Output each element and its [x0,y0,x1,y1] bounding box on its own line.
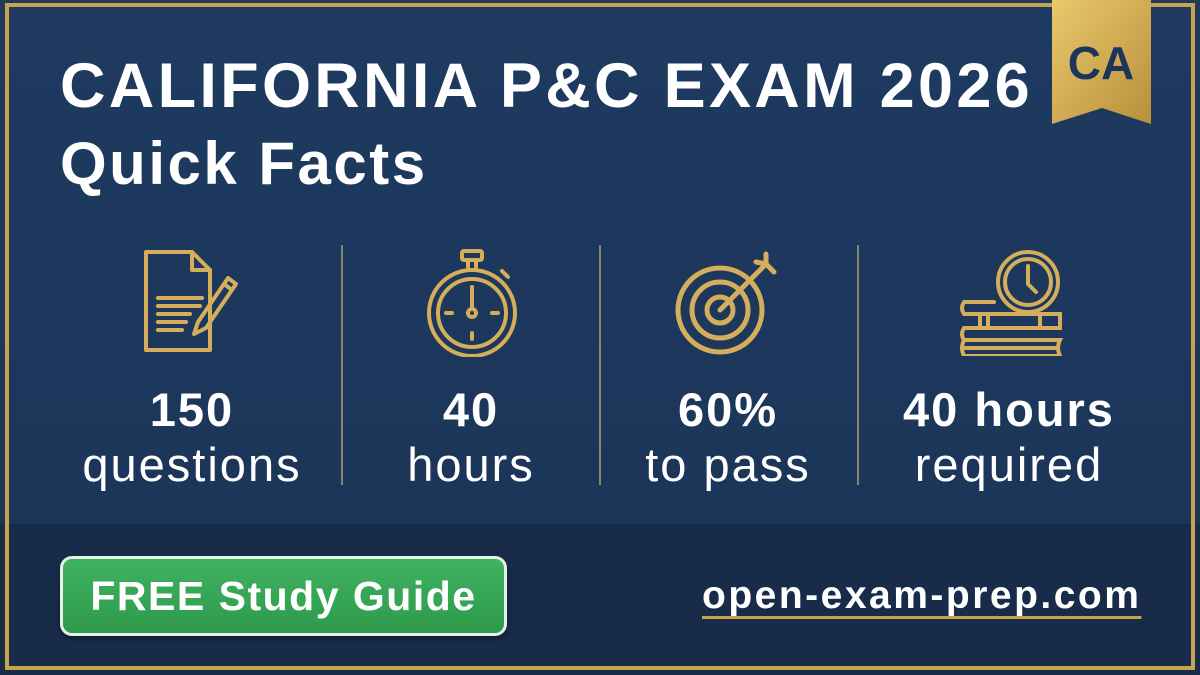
stat: 40 hours required [903,383,1115,491]
url text: open-exam-prep.com [702,574,1141,617]
icon: document with pen [144,250,238,352]
button: FREE Study Guide [60,556,507,636]
icon: stopwatch [427,249,517,357]
stat: 150 questions: questions [82,438,302,491]
bottom band [0,524,1200,675]
icon: books and clock [960,250,1064,356]
stat: 60% to pass: to pass [645,438,811,491]
main panel [0,0,1200,524]
subtitle: Quick Facts [60,130,428,197]
stat: 150 questions [82,383,302,491]
button: FREE Study Guide: FREE Study Guide [90,573,477,619]
stat: 40 hours required: required [915,438,1103,491]
stat: 40 hours: hours [407,438,535,491]
stat: 40 hours required: 40 hours [903,383,1115,436]
icon: target [676,252,776,354]
stat: 40 hours [407,383,535,491]
title: CALIFORNIA P&C EXAM 2026 [60,51,1033,121]
stat: 60% to pass [645,383,811,491]
stat: 60% to pass: 60% [678,383,778,436]
badge: CA ribbon: CA [1068,37,1134,89]
badge: CA ribbon [1052,0,1151,124]
stat: 40 hours: 40 [443,383,499,436]
stat: 150 questions: 150 [150,383,234,436]
